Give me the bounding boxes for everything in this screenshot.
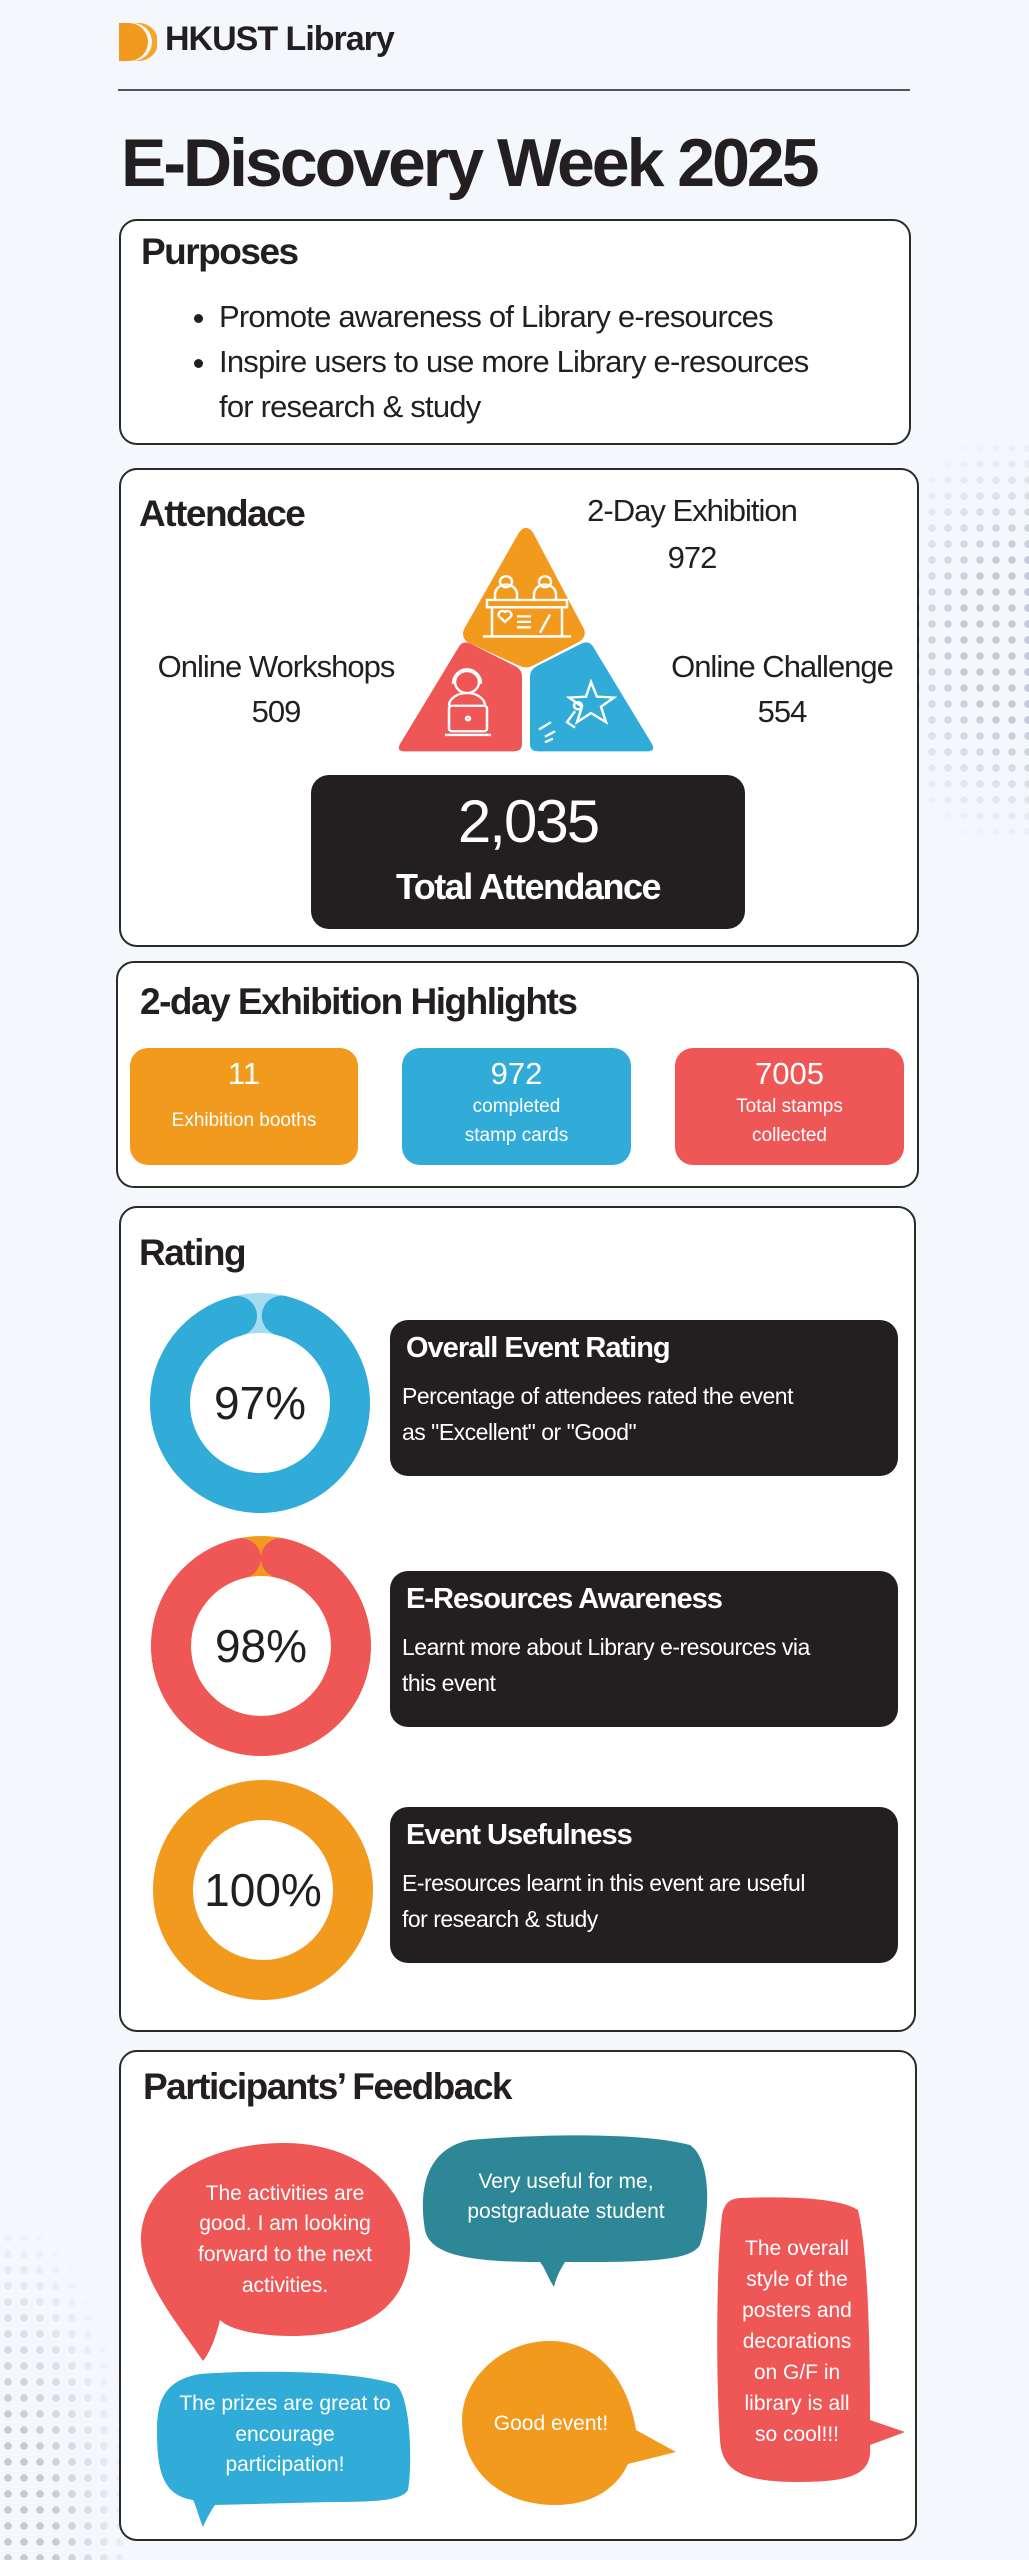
card: stamp cards: 972 [491,1056,542,1091]
card: stamps: collected [752,1125,827,1146]
blue segment [530,642,653,751]
bubble: activities: activities. [242,2274,328,2297]
label: challenge: 554 [758,694,806,729]
purpose list: for research & study [219,389,480,424]
logo: HKUST Library [165,20,394,58]
rating box: overall: Percentage of attendees rated the event [402,1383,793,1409]
bubble: good event: Good event! [494,2412,608,2435]
heading: feedback: Participants’ Feedback [143,2066,511,2107]
bubble: prizes: The prizes are great to [179,2392,391,2415]
label: workshops: Online Workshops [158,649,394,684]
rating box: usefulness: for research & study [402,1906,598,1932]
rating box: overall: Overall Event Rating [406,1332,670,1364]
bubble: overall style: decorations [743,2330,851,2353]
triangle chart [398,528,654,752]
bubble: postgraduate [423,2135,707,2287]
orange segment [463,528,585,667]
bubble: overall style: posters and [742,2299,852,2322]
card: stamp cards [402,1048,631,1165]
rating box: usefulness: E-resources learnt in this event are useful [402,1870,805,1896]
heading: attendance: Attendace [139,493,304,534]
bubble: overall style: style of the [746,2268,848,2291]
card: booths: 11 [228,1056,260,1091]
bubble: overall style: on G/F in [754,2361,840,2384]
bubble: prizes: encourage [235,2423,335,2446]
donut: 100% [153,1780,373,2000]
total attendance [311,775,745,929]
panel: exhibition highlights [116,961,919,1188]
title: E-Discovery Week 2025 [121,125,817,201]
rating box: overall [390,1320,898,1476]
rating box: overall: as "Excellent" or "Good" [402,1419,636,1445]
bubble: overall style: so cool!!! [755,2423,839,2446]
bubble: prizes: participation! [225,2453,345,2476]
label: exhibition: 2-Day Exhibition [587,493,797,528]
rating box: usefulness [390,1807,898,1963]
label: workshops: 509 [252,694,300,729]
bubble: prizes [157,2372,410,2527]
bubble: overall style [717,2197,905,2482]
total attendance: 2,035 [458,788,598,855]
bubble: activities [141,2143,410,2361]
bubble: activities: forward to the next [198,2243,372,2266]
heading: rating: Rating [139,1232,245,1273]
bubble: activities: The activities are [206,2182,364,2205]
purpose list: Inspire users to use more Library e-resources [219,344,808,379]
rating box: awareness: this event [402,1670,495,1696]
card: stamps: 7005 [755,1056,824,1091]
purpose list: Promote awareness of Library e-resources [219,299,773,334]
donut: 100%: 100% [204,1864,322,1916]
total attendance: Total Attendance [396,866,660,907]
bubble: good event [462,2341,676,2505]
bubble: overall style: The overall [745,2237,849,2260]
panel: feedback [119,2050,917,2541]
heading: highlights: 2-day Exhibition Highlights [140,981,576,1022]
card: booths [130,1048,358,1165]
card: stamp cards: completed [473,1096,560,1117]
purpose list [194,299,808,424]
label: exhibition [587,493,797,575]
card: stamps: Total stamps [736,1096,843,1117]
rating box: awareness: E-Resources Awareness [406,1583,722,1615]
bubble: postgraduate: postgraduate student [467,2200,665,2223]
donut: 97% [150,1293,370,1513]
label: challenge: Online Challenge [671,649,893,684]
red segment [399,642,522,751]
label: exhibition: 972 [668,540,716,575]
panel: purposes [119,219,911,445]
bubble: activities: good. I am looking [199,2212,371,2235]
donut: 97%: 97% [214,1377,306,1429]
rating box: usefulness: Event Usefulness [406,1819,632,1851]
bubble: postgraduate: Very useful for me, [478,2170,654,2193]
label: workshops [158,649,394,729]
card: booths: Exhibition booths [172,1110,316,1131]
panel: attendance [119,468,919,947]
rating box: awareness [390,1571,898,1727]
card: stamp cards: stamp cards [465,1125,568,1146]
panel: rating [119,1206,916,2032]
bubble: overall style: library is all [744,2392,850,2415]
heading: purposes: Purposes [141,231,298,272]
rating box: awareness: Learnt more about Library e-resources via [402,1634,810,1660]
donut: 98% [151,1536,371,1756]
label: challenge [671,649,893,729]
donut: 98%: 98% [215,1620,307,1672]
card: stamps [675,1048,904,1165]
